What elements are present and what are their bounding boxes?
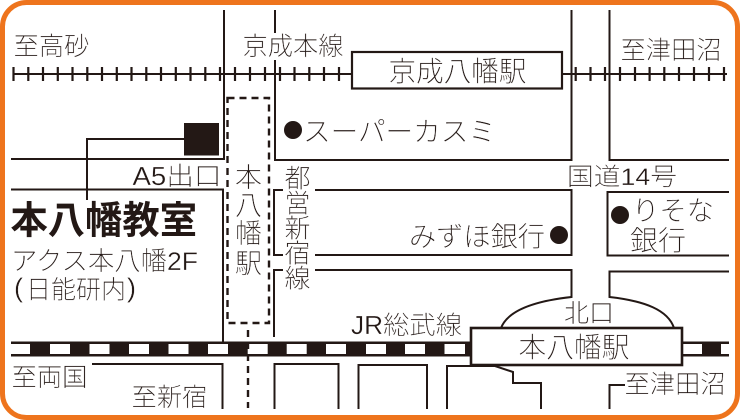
school address: 2F — [167, 248, 198, 276]
label: to Tsudanuma top: 至津田沼 — [620, 37, 722, 65]
label: Toei Shinjuku line vertical: 宿 — [284, 238, 311, 268]
label: Motoyawata station vertical: 八 — [235, 191, 262, 221]
school address note: 日能研内 — [26, 276, 126, 304]
label: Toei Shinjuku line vertical: 線 — [284, 264, 311, 294]
Motoyawata subway station dashed outline — [228, 98, 269, 408]
label: JR Sobu line: JR総武線 — [351, 312, 462, 340]
JR Sobu railway line — [11, 342, 729, 356]
label: Toei Shinjuku line vertical: 新 — [284, 214, 311, 244]
Motoyawata station box: 本八幡駅 — [518, 332, 630, 363]
Keisei Yawata station box — [352, 52, 562, 88]
Motoyawata station box — [471, 328, 682, 365]
school address: アクス本八幡 — [11, 246, 167, 276]
label: Toei Shinjuku line vertical: 都 — [284, 164, 311, 194]
label: A5 exit: A5出口 — [132, 163, 222, 191]
label: Motoyawata station vertical: 本 — [235, 163, 262, 193]
school location marker — [87, 123, 219, 200]
label: Motoyawata station vertical: 幡 — [235, 219, 262, 249]
Keisei railway line — [13, 67, 727, 81]
landmark: Resona Bank: 銀行 — [630, 225, 686, 256]
landmark: Super Kasumi: スーパーカスミ — [303, 116, 496, 147]
label: Motoyawata station vertical: 駅 — [235, 249, 262, 279]
label: Motoyawata station vertical — [235, 163, 262, 279]
landmark: Resona Bank — [611, 195, 714, 256]
label: route 14: 国道14号 — [567, 163, 677, 191]
landmark: Mizuho Bank: みずほ銀行 — [409, 221, 545, 252]
school address note: ( — [14, 273, 23, 303]
school address note: ) — [127, 273, 136, 303]
label: to Ryogoku: 至両国 — [12, 364, 88, 392]
label: to Shinjuku: 至新宿 — [132, 384, 208, 412]
label: Toei Shinjuku line vertical: 営 — [284, 188, 311, 218]
label: Keisei main line: 京成本線 — [242, 33, 344, 61]
label: Toei Shinjuku line vertical — [284, 164, 311, 294]
label: to Takasago: 至高砂 — [14, 33, 90, 61]
label: to Tsudanuma bottom: 至津田沼 — [624, 371, 726, 399]
landmark: Resona Bank: りそな — [632, 195, 714, 226]
label: north exit: 北口 — [564, 300, 614, 328]
school name: 本八幡教室 — [10, 200, 197, 242]
Keisei Yawata station box: 京成八幡駅 — [388, 56, 526, 87]
